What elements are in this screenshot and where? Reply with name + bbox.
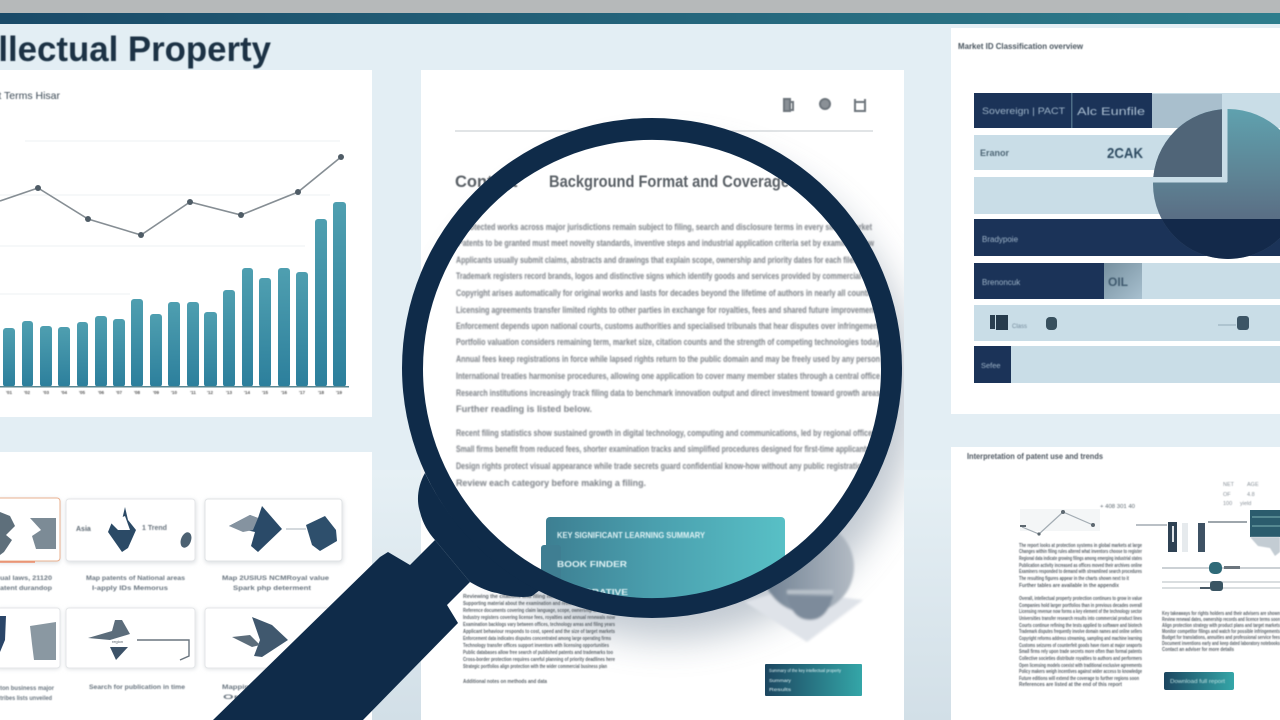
row 5 xyxy=(974,263,1280,299)
report text block 2: Customs seizures of counterfeit goods have risen at major seaports xyxy=(1019,643,1142,649)
captions row 1: ual laws, 21120 xyxy=(0,575,52,582)
report text block 2: Copyright reforms address streaming, sampling and machine learning xyxy=(1019,636,1142,642)
axis labels: '01 xyxy=(6,390,13,395)
text block under lens: Examination backlogs vary between offices, technology areas and filing years xyxy=(463,622,615,628)
document heading: Content xyxy=(455,173,518,191)
card 4 xyxy=(0,608,60,669)
paragraph 1: Research institutions increasingly track filing data to benchmark innovation output and direct investment toward growth areas xyxy=(456,388,880,399)
row 1: Sovereign | PACT xyxy=(982,106,1065,117)
axis labels: '04 xyxy=(61,390,68,395)
report text block 1: Further tables are available in the appendix xyxy=(1019,583,1120,589)
paragraph 1: Trademark registers record brands, logos and distinctive signs which identify goods and services provided by commercial firms xyxy=(456,271,880,282)
magnifier handle xyxy=(213,540,470,720)
magnifier ring xyxy=(402,118,902,618)
card 5: region xyxy=(112,639,123,644)
sliders xyxy=(1162,562,1280,591)
report text block 2: Policy makers weigh incentives against wider access to knowledge xyxy=(1019,669,1142,675)
report button: Download full report xyxy=(1170,679,1226,685)
report text block 1: The resulting figures appear in the charts shown next to it xyxy=(1019,576,1129,582)
axis labels: '15 xyxy=(262,390,269,395)
icon: magnifying glass xyxy=(213,118,902,720)
row 6 xyxy=(974,305,1280,341)
report text block 1: Changes within filing rules altered what inventors choose to register xyxy=(1019,549,1143,555)
small bars and labels xyxy=(1136,482,1280,556)
small bars and labels: AGE xyxy=(1247,482,1259,488)
card 6 xyxy=(205,608,343,669)
small line chart xyxy=(1020,504,1135,536)
paragraph 1: Licensing agreements transfer limited rights to other parties in exchange for royalties, fees and shared future improvements xyxy=(456,305,880,316)
report text block 2: References are listed at the end of this report xyxy=(1019,682,1122,688)
axis labels: '03 xyxy=(43,390,50,395)
paragraph 1: Copyright arises automatically for original works and lasts for decades beyond the lifetime of authors in nearly all countries xyxy=(456,288,880,299)
divider line xyxy=(455,130,873,132)
captions row 1: I-apply IDs Memorus xyxy=(92,585,168,592)
paragraph 2: Review each category before making a filing. xyxy=(456,478,646,489)
small bars and labels: yield xyxy=(1240,501,1251,507)
captions row 1 xyxy=(0,575,329,592)
axis labels: '16 xyxy=(281,390,288,395)
captions row 2: ton business major xyxy=(0,685,54,692)
lens interior xyxy=(420,137,884,601)
card 2 xyxy=(66,499,196,563)
report text block 2: Overall, intellectual property protection continues to grow in value xyxy=(1019,596,1142,602)
report text block 2: Companies hold larger portfolios than in previous decades overall xyxy=(1019,603,1142,609)
paragraph 2 xyxy=(456,428,876,489)
paragraph 2: Design rights protect visual appearance while trade secrets guard confidential know-how without any public registration xyxy=(456,461,866,472)
captions row 2: tribes lists unveiled xyxy=(0,695,52,702)
axis labels: '18 xyxy=(318,390,325,395)
captions row 1: Spark php determent xyxy=(233,585,312,592)
card 3 xyxy=(205,499,343,563)
text block under lens: Technology transfer offices support inventors with licensing opportunities xyxy=(463,643,609,649)
lens shadow xyxy=(422,148,914,640)
chart gridlines and bars xyxy=(0,141,349,388)
paragraph 2: Recent filing statistics show sustained growth in digital technology, computing and communications, led by regional offices xyxy=(456,428,876,439)
report text block 2: Future editions will extend the coverage to further regions soon xyxy=(1019,676,1139,682)
axis labels: '17 xyxy=(299,390,306,395)
panel: center document xyxy=(420,70,914,720)
small bars and labels: NET xyxy=(1223,482,1235,488)
small bars and labels: OF xyxy=(1223,492,1231,498)
axis labels: '06 xyxy=(98,390,105,395)
paragraph 1: Annual fees keep registrations in force while lapsed rights return to the public domain and may be freely used by any person xyxy=(456,354,880,365)
captions row 2: Mapping data xyxy=(222,684,272,691)
paragraph 2: Small firms benefit from reduced fees, shorter examination tracks and simplified procedures designed for first-time applicants xyxy=(456,444,870,455)
axis labels: '08 xyxy=(134,390,141,395)
row 4: Bradypoie xyxy=(982,235,1019,244)
row 3 xyxy=(974,177,1280,214)
paragraph 1 xyxy=(456,222,881,415)
report text block 2: Universities transfer research results into commercial product lines xyxy=(1019,616,1142,622)
axis labels: '02 xyxy=(24,390,31,395)
report button xyxy=(1164,672,1234,690)
row 1 xyxy=(974,93,1280,128)
report text block 1 xyxy=(1019,543,1143,589)
text block under lens: Reference documents covering claim language, scope, ownership and rights xyxy=(463,608,613,614)
report text block 3 xyxy=(1162,611,1280,653)
axis labels: '10 xyxy=(171,390,178,395)
teal legend box: Summary of the key intellectual property xyxy=(769,668,842,673)
small bars and labels: 100 xyxy=(1223,501,1232,507)
text block under lens: Additional notes on methods and data xyxy=(463,679,548,685)
text block under lens: Cross-border protection requires careful planning of priority deadlines here xyxy=(463,657,616,663)
document heading xyxy=(455,173,789,191)
axis labels: '05 xyxy=(79,390,86,395)
report text block 2: Open licensing models coexist with traditional exclusive agreements xyxy=(1019,663,1142,669)
panel heading: Market ID Classification overview xyxy=(958,42,1084,51)
paragraph 1: Applicants usually submit claims, abstracts and drawings that explain scope, ownership and priority dates for each filed work xyxy=(456,255,877,266)
teal callout xyxy=(541,517,785,605)
teal callout: KEY SIGNIFICANT LEARNING SUMMARY xyxy=(557,530,705,540)
text block under lens: Public databases allow free search of published patents and trademarks too xyxy=(463,650,613,656)
trend line xyxy=(0,154,344,238)
text block under lens: Reviewing the citations and filing notes here xyxy=(463,594,574,600)
teal callout: BOOK FINDER xyxy=(557,559,627,569)
row 5: Brenoncuk xyxy=(982,278,1021,287)
captions row 1: Map 2USIUS NCMRoyal value xyxy=(222,575,329,582)
panel: table and pie xyxy=(951,28,1280,414)
row 5: OIL xyxy=(1108,275,1128,289)
report text block 2: Collective societies distribute royalties to authors and performers xyxy=(1019,656,1142,662)
captions row 2 xyxy=(0,684,272,702)
report text block 2: Courts continue refining the tests applied to software and biotech xyxy=(1019,623,1142,629)
toolbar icons xyxy=(784,99,865,111)
paragraph 1: Protected works across major jurisdictions remain subject to filing, search and disclosure terms in every single market xyxy=(462,222,873,233)
text block under lens: Applicant behaviour responds to cost, speed and the size of target markets xyxy=(463,629,615,635)
report text block 1: Examiners responded to demand with streamlined search procedures xyxy=(1019,569,1142,575)
row 2: Eranor xyxy=(980,148,1010,158)
row 1: Alc Eunfile xyxy=(1077,106,1145,118)
panel: report page xyxy=(951,447,1280,720)
teal callout: NARRATIVE xyxy=(570,587,628,597)
report text block 2 xyxy=(1019,596,1143,688)
text block under lens: Supporting material about the examination and review process xyxy=(463,601,593,607)
report text block 2: Small firms rely upon trade secrets more often than formal patents xyxy=(1019,649,1142,655)
text block under lens: Strategic portfolios align protection with the wider commercial business plan xyxy=(463,664,607,670)
report text block 1: Publication activity increased as offices moved their archives online xyxy=(1019,563,1142,569)
report text block 2: Trademark disputes frequently involve domain names and online sellers xyxy=(1019,629,1142,635)
card 2: Asia xyxy=(76,526,91,533)
axis labels: '07 xyxy=(116,390,123,395)
report heading: Interpretation of patent use and trends xyxy=(967,452,1104,461)
row 6: Class xyxy=(1012,324,1027,330)
axis labels: '14 xyxy=(244,390,251,395)
gray pie behind lens xyxy=(745,521,863,642)
axis labels: '12 xyxy=(207,390,214,395)
pie chart xyxy=(1150,105,1280,261)
paragraph 1: Portfolio valuation considers remaining term, market size, citation counts and the strength of competing technologies today xyxy=(456,337,881,348)
document heading: Background Format and Coverage xyxy=(549,173,789,191)
paragraph 1: Enforcement depends upon national courts, customs authorities and specialised tribunals that hear disputes over infringement xyxy=(456,321,881,332)
text block under lens xyxy=(463,594,616,685)
panel: bar and line chart xyxy=(0,70,372,417)
captions row 1: atent durandop xyxy=(0,585,52,592)
row 2 xyxy=(974,135,1280,170)
row 7: Sefee xyxy=(981,361,1001,370)
card 5 xyxy=(66,608,196,669)
magnifier collar xyxy=(418,473,540,597)
panel: map cards xyxy=(0,452,372,720)
teal legend box xyxy=(765,664,862,696)
axis labels: '19 xyxy=(336,390,343,395)
axis labels: '09 xyxy=(153,390,160,395)
small bars and labels: 4.8 xyxy=(1247,492,1255,498)
row 2: 2CAK xyxy=(1107,145,1143,162)
report text block 3: Contact an adviser for more details xyxy=(1162,647,1234,653)
paragraph 1: International treaties harmonise procedures, allowing one application to cover many member states through a central office xyxy=(456,371,880,382)
card 1 xyxy=(0,498,60,563)
text block under lens: Industry registers covering license fees, royalties and annual renewals now xyxy=(463,615,615,621)
axis labels xyxy=(6,390,343,395)
report text block 1: The report looks at protection systems in global markets at large xyxy=(1019,543,1142,549)
axis labels: '13 xyxy=(226,390,233,395)
report text block 2: Licensing revenue now forms a key element of the technology sector xyxy=(1019,609,1143,615)
small line chart: + 408 301 40 xyxy=(1100,504,1135,510)
report text block 1: Regional data indicate growing filings among emerging industrial states xyxy=(1019,556,1142,562)
card 2: 1 Trend xyxy=(142,525,167,532)
captions row 1: Map patents of National areas xyxy=(86,575,185,582)
captions row 2: Search for publication in time xyxy=(89,684,185,691)
row 4 xyxy=(974,219,1280,256)
text block under lens: Enforcement data indicates disputes concentrated among large operating firms xyxy=(463,636,611,642)
captions row 2: Origin xyxy=(223,694,263,701)
axis labels: '11 xyxy=(190,390,196,395)
paragraph 1: Further reading is listed below. xyxy=(456,404,592,415)
row 7 xyxy=(974,346,1280,383)
teal legend box: Summary xyxy=(769,678,792,683)
teal legend box: Results xyxy=(769,687,792,692)
top band xyxy=(0,0,1280,24)
paragraph 1: Patents to be granted must meet novelty standards, inventive steps and industrial application criteria set by examiners now xyxy=(458,238,874,249)
